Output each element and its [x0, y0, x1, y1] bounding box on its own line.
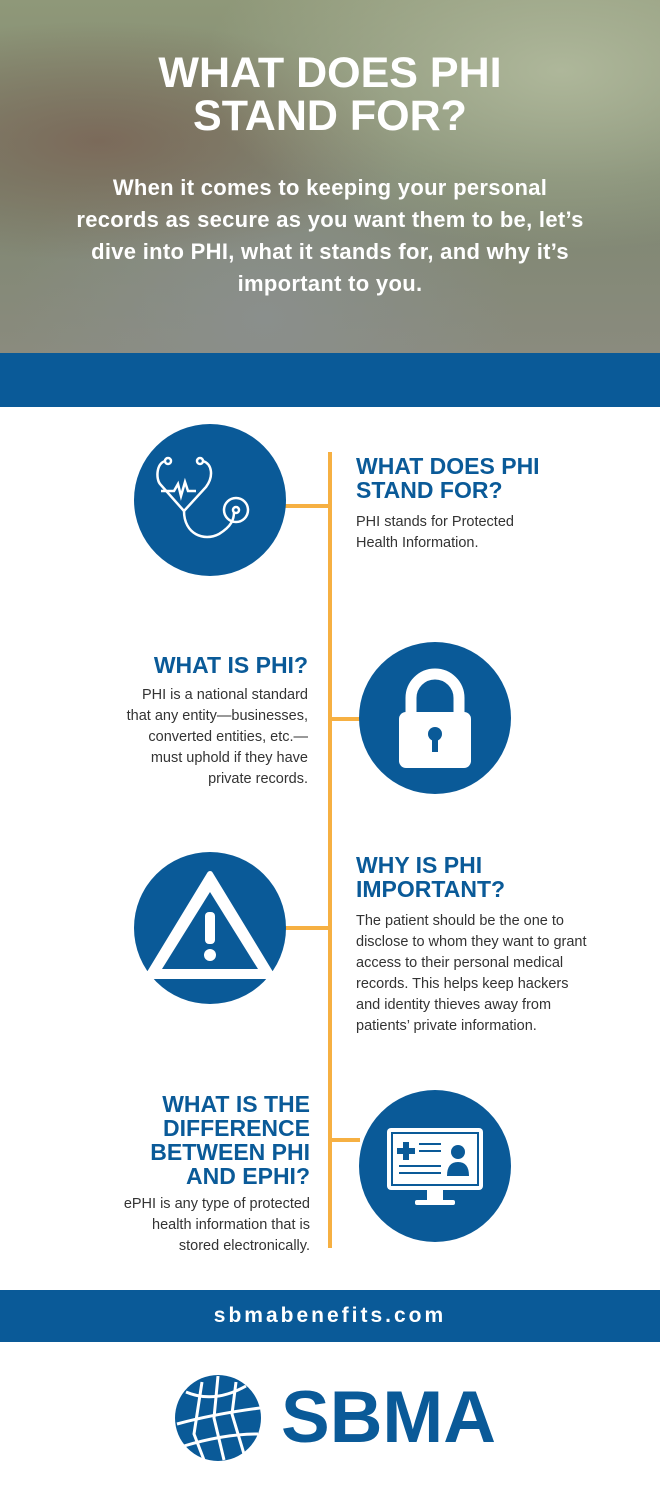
- section 4 text: ePHI is any type of protected: [124, 1196, 310, 1212]
- header intro text: dive into PHI, what it stands for, and why it’s: [91, 239, 569, 264]
- section 2 text: [126, 652, 308, 787]
- logo: SBMA: [175, 1375, 496, 1461]
- section 3 text: IMPORTANT?: [356, 876, 505, 902]
- section 2 text: WHAT IS PHI?: [154, 652, 308, 678]
- logo text: SBMA: [281, 1377, 496, 1458]
- icon: monitor record: [359, 1090, 511, 1242]
- section 2 text: that any entity—businesses,: [127, 708, 308, 724]
- section 1 text: Health Information.: [356, 535, 479, 551]
- header intro text: When it comes to keeping your personal: [113, 175, 547, 200]
- icon: globe: [175, 1375, 261, 1461]
- blue band: [0, 353, 660, 407]
- header photo panel: [0, 0, 660, 353]
- section 2 text: must uphold if they have: [151, 750, 308, 766]
- footer band with url: [0, 1290, 660, 1342]
- section 4 text: BETWEEN PHI: [150, 1139, 310, 1165]
- header title: WHAT DOES PHI: [158, 49, 502, 97]
- header intro text: important to you.: [238, 271, 422, 296]
- connectors: [285, 504, 330, 508]
- section 3 text: [356, 852, 587, 1034]
- icon: warning: [134, 852, 286, 1004]
- header intro text: records as secure as you want them to be, let’s: [76, 207, 584, 232]
- section 4 text: health information that is: [152, 1217, 310, 1233]
- section 4 text: [124, 1091, 310, 1254]
- section 4 text: DIFFERENCE: [163, 1115, 310, 1141]
- section 2 text: private records.: [208, 771, 308, 787]
- section 3 text: WHY IS PHI: [356, 852, 482, 878]
- section 3 text: The patient should be the one to: [356, 913, 564, 929]
- section 3 text: access to their personal medical: [356, 955, 563, 971]
- section 4 text: stored electronically.: [179, 1238, 310, 1254]
- icon: padlock: [359, 642, 511, 794]
- section 4 text: AND EPHI?: [186, 1163, 310, 1189]
- section 4 text: WHAT IS THE: [162, 1091, 310, 1117]
- header title: [158, 49, 502, 140]
- icon: stethoscope: [134, 424, 286, 576]
- section 3 text: disclose to whom they want to grant: [356, 934, 587, 950]
- section 2 text: PHI is a national standard: [142, 687, 308, 703]
- section 3 text: patients’ private information.: [356, 1018, 537, 1034]
- header title: STAND FOR?: [193, 92, 467, 140]
- section 3 text: and identity thieves away from: [356, 997, 551, 1013]
- footer band with url: sbmabenefits.com: [214, 1304, 446, 1327]
- section 1 text: [356, 453, 540, 551]
- section 1 text: WHAT DOES PHI: [356, 453, 540, 479]
- header intro text: [76, 175, 584, 296]
- timeline line: [328, 452, 332, 1248]
- section 2 text: converted entities, etc.—: [148, 729, 308, 745]
- section 3 text: records. This helps keep hackers: [356, 976, 569, 992]
- section 1 text: STAND FOR?: [356, 477, 503, 503]
- section 1 text: PHI stands for Protected: [356, 514, 514, 530]
